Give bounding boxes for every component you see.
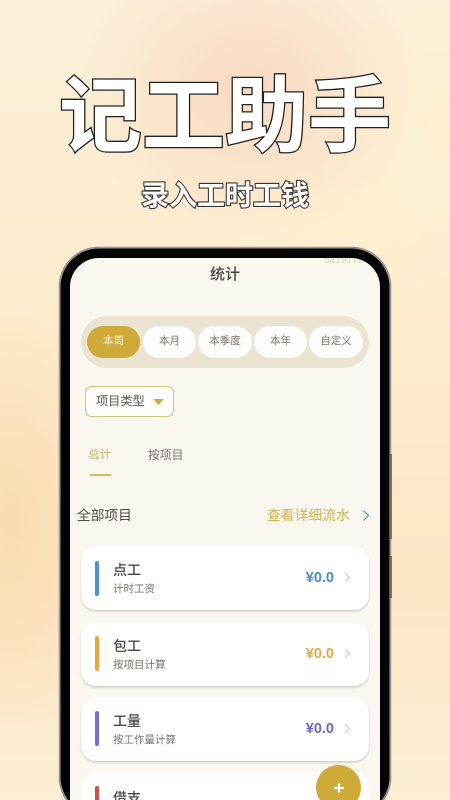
tab: this year: 本年 (270, 335, 291, 347)
dropdown label: 项目类型 (96, 394, 145, 408)
card title: 点工 (113, 562, 141, 578)
dropdown arrow (153, 399, 164, 405)
tab: custom (309, 326, 363, 358)
card: advance (81, 772, 369, 800)
icon: blue chevron (363, 510, 370, 521)
tab: custom: 自定义 (320, 335, 352, 347)
details link: 查看详细流水 (267, 508, 350, 523)
accent bar (95, 786, 99, 800)
subtitle: 录入工时工钱 (141, 180, 309, 211)
card subtitle: 计时工资 (113, 583, 155, 595)
plus icon (334, 783, 344, 793)
project type dropdown (85, 386, 174, 417)
chevron (344, 572, 350, 582)
tab underline (90, 474, 111, 476)
accent bar (95, 711, 99, 746)
card title: 工量 (113, 713, 141, 729)
amount: ¥0.0 (306, 646, 334, 662)
tab: this quarter (198, 326, 252, 358)
card subtitle: 按项目计算 (113, 659, 166, 671)
card title: 包工 (113, 638, 141, 654)
accent bar (95, 561, 99, 596)
section heading: 全部项目 (77, 508, 132, 523)
tab: this year (254, 326, 307, 358)
amount: ¥0.0 (306, 721, 334, 737)
tab: total: 总计 (88, 449, 111, 461)
amount: ¥0.0 (306, 570, 334, 586)
card: contract (81, 622, 369, 686)
chevron (344, 648, 350, 658)
tab: by project: 按项目 (148, 448, 183, 462)
card: piecework (81, 697, 369, 761)
accent bar (95, 636, 99, 671)
add button (316, 765, 361, 800)
tab: this month (143, 326, 196, 358)
tab: this quarter: 本季度 (209, 335, 241, 347)
card subtitle: 按工作量计算 (113, 734, 176, 746)
tab: this month: 本月 (159, 335, 180, 347)
tab: this week (87, 326, 140, 358)
screen heading: 统计 (210, 266, 240, 283)
period selector (81, 316, 369, 368)
phone screen (70, 258, 380, 800)
tab: this week: 本周 (103, 335, 124, 347)
chevron (344, 724, 350, 734)
phone frame (59, 247, 391, 800)
title: 记工助手 (59, 70, 391, 163)
card: hourly (81, 546, 369, 610)
side button lower (390, 556, 392, 598)
side button upper (390, 454, 392, 539)
